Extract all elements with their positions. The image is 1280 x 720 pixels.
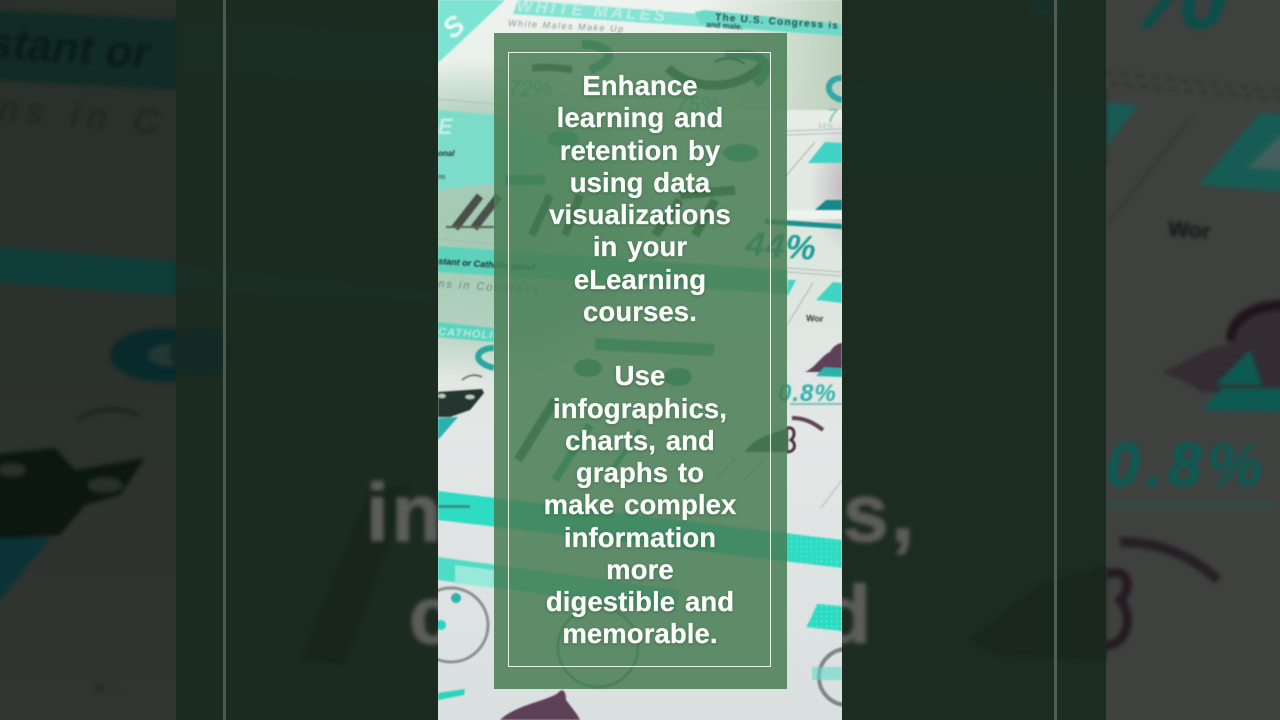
mint side panel: E xyxy=(438,114,454,139)
caption text: digestible and xyxy=(546,586,734,617)
bottom dot texture xyxy=(816,651,837,702)
right column details xyxy=(743,78,842,325)
caption text: Enhance xyxy=(582,70,698,101)
teal bands mid column: CATHOLIC xyxy=(438,326,503,342)
caption text: courses. xyxy=(583,296,697,327)
caption text: in your xyxy=(593,231,687,262)
top banner xyxy=(436,0,842,63)
right blurred background: 0.8% xyxy=(1106,431,1267,500)
teal bands mid column: ns in Congress xyxy=(438,278,540,297)
caption text: retention by xyxy=(560,134,720,166)
right lower details: 0.8% xyxy=(778,380,837,407)
caption text: eLearning xyxy=(574,264,706,294)
caption text: visualizations xyxy=(549,199,731,230)
percentage numbers in the column xyxy=(510,80,720,112)
caption text: more xyxy=(606,554,674,585)
mint side panel: onal xyxy=(438,149,455,158)
percentage numbers in the column: 75% xyxy=(676,92,720,117)
thin white frame xyxy=(508,52,771,667)
enlarged blurred caption behind the column: infographics, xyxy=(366,468,914,559)
caption text xyxy=(544,70,736,649)
enlarged blurred caption behind the column: charts, and xyxy=(409,570,871,661)
caption text: infographics, xyxy=(553,392,727,424)
percentage numbers in the column: 72% xyxy=(508,76,552,101)
translucent green text panel xyxy=(494,33,787,689)
wide teal band xyxy=(438,491,842,568)
right blurred background xyxy=(1100,0,1280,720)
top banner: S xyxy=(436,9,471,45)
enlarged blurred caption behind the column xyxy=(366,468,914,661)
caption text: learning and xyxy=(557,102,723,133)
caption text: memorable. xyxy=(562,618,718,649)
caption text: make complex xyxy=(544,489,736,520)
right blurred background: Wor xyxy=(1167,216,1212,244)
purple blob and small stripe xyxy=(438,689,580,720)
side vertical frame lines xyxy=(223,0,1057,720)
caption text: using data xyxy=(570,167,710,198)
dark figures xyxy=(446,180,735,235)
ghosted shapes in dark overlay xyxy=(170,0,1106,665)
left blurred background xyxy=(0,0,176,720)
caption text: graphs to xyxy=(576,457,704,488)
right column details: SEN xyxy=(818,124,833,130)
teal bands mid column xyxy=(438,246,787,368)
top banner: White Males Make Up xyxy=(508,18,625,34)
caption text: Use xyxy=(615,360,665,391)
mint side panel xyxy=(438,98,506,244)
second teal ribbon xyxy=(438,557,680,612)
left blurred background: ns in C xyxy=(0,90,169,143)
central infographic photograph xyxy=(438,0,842,720)
left blurred background: N ... xyxy=(95,680,119,695)
mint side panel: ns xyxy=(438,174,446,181)
ring gauges xyxy=(414,588,875,705)
right column details: 44% xyxy=(743,225,818,268)
right column details: 7 xyxy=(827,106,838,126)
top arcs in the column xyxy=(532,44,766,85)
lower dark figure xyxy=(438,359,788,480)
top banner: The U.S. Congress is xyxy=(715,12,839,32)
dark green side overlay xyxy=(176,0,1106,720)
teal bands mid column: stant or Catholic belief xyxy=(438,256,536,273)
right column details: Wor xyxy=(806,313,824,324)
caption text: information xyxy=(564,522,716,552)
right lower details xyxy=(778,343,842,508)
top banner: and male. xyxy=(706,20,743,32)
caption text: charts, and xyxy=(565,425,715,456)
